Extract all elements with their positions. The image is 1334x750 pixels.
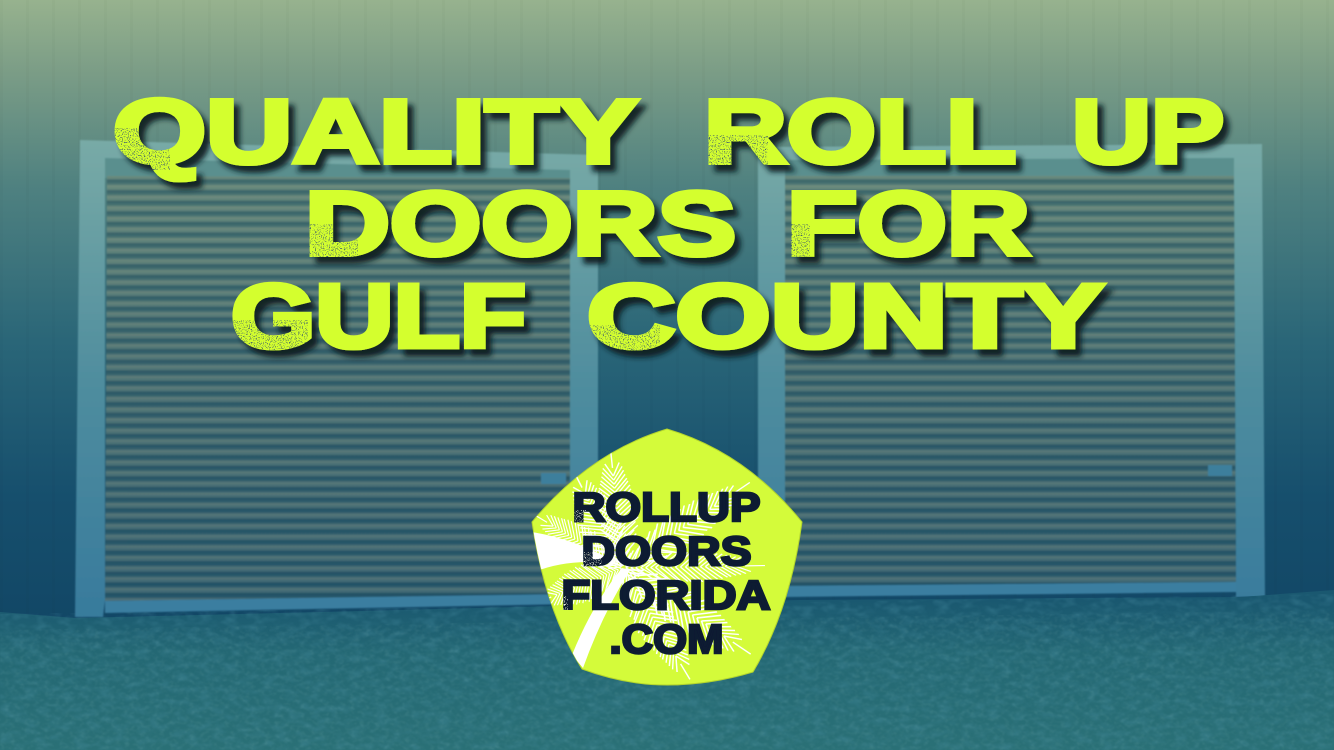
title line 1: ROLL	[704, 82, 1016, 182]
title	[113, 82, 1224, 367]
title line 1: QUALITY	[113, 82, 638, 182]
left door shutter	[105, 176, 570, 601]
logo wordmark: ROLLUP	[572, 484, 760, 530]
left door latch	[541, 473, 566, 484]
right roll up door	[758, 144, 1265, 597]
left door frame	[75, 140, 598, 617]
logo wordmark	[562, 484, 770, 662]
right door sill	[785, 582, 1236, 597]
right door shutter	[785, 176, 1236, 586]
icon: palm tree	[526, 450, 765, 690]
left door sill	[105, 594, 570, 613]
title line 2: FOR	[787, 174, 1030, 274]
logo wordmark: DOORS	[582, 528, 752, 574]
title line 3	[231, 267, 1104, 367]
title line 2: DOORS	[305, 174, 736, 274]
logo wordmark: .COM	[610, 616, 724, 662]
right door latch	[1208, 465, 1232, 476]
title line 1	[113, 82, 1224, 182]
badge shape	[532, 429, 802, 685]
logo wordmark: FLORIDA	[562, 572, 770, 618]
left roll up door	[75, 140, 598, 617]
title line 2	[305, 174, 1030, 274]
right door header	[785, 158, 1234, 178]
right door frame	[758, 144, 1265, 597]
logo badge	[526, 429, 802, 690]
left door header	[105, 158, 570, 180]
title line 3: GULF	[231, 267, 526, 367]
grass foreground	[0, 590, 1334, 750]
title line 1: UP	[1072, 82, 1224, 182]
title line 3: COUNTY	[587, 267, 1104, 367]
